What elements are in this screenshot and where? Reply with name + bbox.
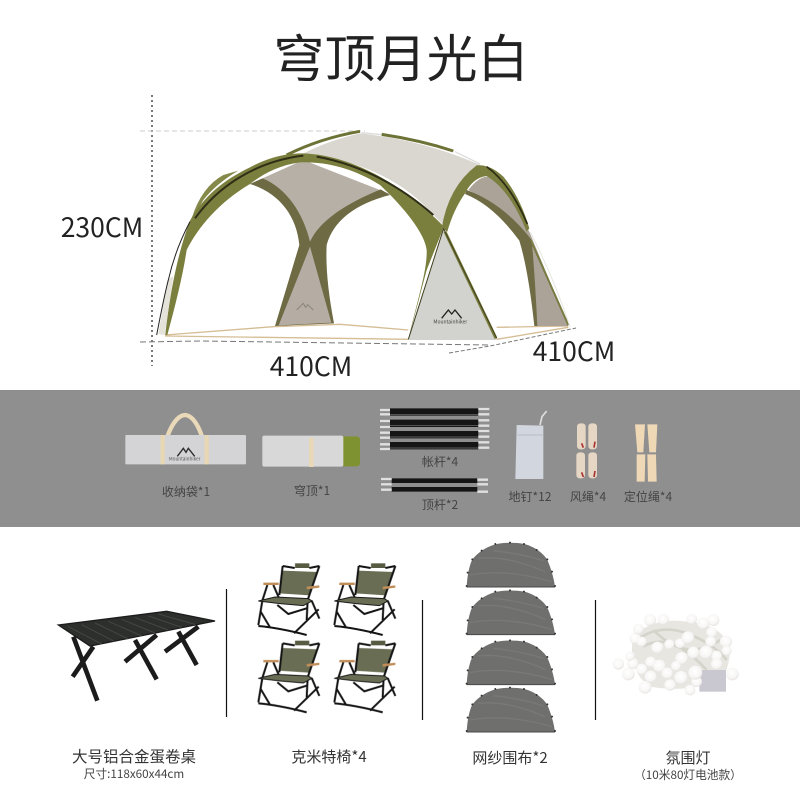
label: wind ropes: 风绳*4 — [570, 488, 606, 505]
tent: roof — [303, 133, 480, 225]
tent: right side wall — [468, 176, 568, 326]
bag straps — [163, 435, 207, 464]
rolled canopy — [262, 436, 360, 467]
bag handle — [163, 415, 207, 463]
table top — [58, 611, 215, 646]
battery box — [699, 670, 726, 692]
shaded cluster base — [632, 621, 730, 689]
folding chairs — [258, 563, 395, 712]
label: top poles: 顶杆*2 — [422, 496, 458, 513]
panel: included accessories — [0, 390, 800, 527]
chair 3 — [258, 641, 319, 712]
tent: front logo: Mountainhiker — [433, 319, 467, 326]
wires — [637, 630, 727, 670]
label: canopy: 穹顶*1 — [294, 482, 330, 499]
chair 2 — [334, 563, 395, 635]
string lights — [613, 614, 739, 695]
label: mesh panels: 网纱围布*2 — [472, 747, 548, 768]
dimension label: depth: 410CM — [533, 330, 615, 369]
divider — [422, 600, 424, 720]
ground stake bag — [515, 411, 547, 479]
table legs — [73, 627, 198, 701]
label: chairs: 克米特椅*4 — [291, 746, 367, 767]
tent: back wall upper — [250, 160, 390, 243]
top poles — [381, 479, 488, 492]
tent: right side arch — [442, 165, 529, 232]
mesh panel 2 — [466, 589, 556, 635]
tent: left pale flap and pole — [157, 222, 190, 335]
tent: front corner panel — [408, 230, 497, 340]
dimension lines — [140, 95, 576, 366]
bag logo: Mountainhiker — [169, 455, 201, 462]
label: storage bag: 收纳袋*1 — [162, 483, 210, 500]
label: stakes: 地钉*12 — [509, 488, 552, 505]
tent: front logo — [433, 310, 467, 326]
table — [58, 611, 215, 701]
tent: back wall lower panel — [279, 247, 331, 325]
label: tent poles: 帐杆*4 — [422, 453, 458, 470]
tent: front arch — [165, 153, 444, 339]
mesh panel 3 — [466, 639, 556, 685]
label: string lights detail: （10米80灯电池款） — [634, 766, 742, 783]
dimension label: width: 410CM — [270, 345, 352, 384]
tent: left side strip — [192, 171, 238, 218]
positioning ropes — [635, 424, 657, 482]
title: 穹顶月光白 — [273, 18, 529, 92]
tent: back logo — [297, 303, 313, 310]
mesh panel 4 — [466, 687, 556, 732]
label: positioning ropes: 定位绳*4 — [624, 488, 672, 505]
label: table: 大号铝合金蛋卷桌 — [72, 745, 196, 767]
storage bag — [125, 415, 246, 464]
label: table size: 尺寸:118x60x44cm — [84, 765, 184, 782]
tent: roof ridge — [287, 131, 453, 155]
tent: ground line — [165, 324, 568, 339]
wind ropes — [576, 423, 597, 478]
tent: right back band — [465, 190, 537, 326]
divider — [594, 600, 596, 720]
dimension label: height: 230CM — [61, 206, 143, 245]
bulbs — [613, 614, 739, 695]
chair 4 — [334, 641, 395, 712]
label: string lights: 氛围灯 — [665, 747, 711, 768]
tent: back wall olive bands — [250, 178, 390, 326]
divider — [226, 589, 228, 717]
mesh panels — [466, 542, 556, 732]
tent illustration — [157, 131, 570, 340]
chair 1 — [258, 563, 319, 635]
mesh panel 1 — [466, 542, 556, 587]
tent poles — [380, 409, 489, 449]
bag body — [125, 435, 246, 464]
